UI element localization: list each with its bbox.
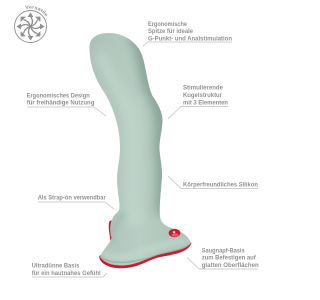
- callout: Ergonomische Spitze: Spitze für ideale: [148, 28, 193, 35]
- callout: Ergonomisches Design: Ergonomisches Design: [27, 92, 90, 99]
- callout: Ergonomisches Design: für freihändige Nutzung: [27, 100, 94, 107]
- body: silhouette: [90, 33, 191, 266]
- callout: Als Strap-on: [38, 194, 114, 209]
- callout: Stimulierende Kugelstruktur: [168, 85, 228, 119]
- callout: Körperfreundliches Silikon: [168, 176, 258, 188]
- callout: Saugnapf-Basis: glatten Oberflächen: [202, 262, 259, 269]
- product: silicone body with suction base: [90, 30, 192, 268]
- callout: Saugnapf-Basis: zum Befestigen auf: [202, 254, 256, 262]
- callout: Ultradünne Basis: Ultradünne Basis: [32, 262, 80, 270]
- callout: Ergonomische Spitze: Ergonomische: [148, 21, 187, 28]
- callout: Ergonomische Spitze: G-Punkt- und Analstimulation: [148, 35, 232, 42]
- callout: Stimulierende Kugelstruktur: Kugelstruktur: [183, 92, 222, 99]
- base: red lower rim: [99, 242, 192, 268]
- callout: Saugnapf-Basis: [187, 247, 259, 269]
- body: shading: [100, 30, 191, 262]
- callout: Ergonomisches Design: [27, 92, 106, 116]
- callout: Ergonomische Spitze: [143, 21, 232, 46]
- callout: Körperfreundliches Silikon: Körperfreundliches Silikon: [183, 181, 258, 188]
- icon: versatile badge: [14, 5, 48, 43]
- callout: Saugnapf-Basis: Saugnapf-Basis: [202, 247, 245, 254]
- callout: Ultradünne Basis: für ein hautnahes Gefühl: [32, 270, 101, 277]
- base: red back rim: [109, 220, 114, 242]
- icon: versatile badge: Versatile: [25, 5, 48, 16]
- callout: Stimulierende Kugelstruktur: mit 3 Elementen: [183, 100, 228, 106]
- callout: Stimulierende Kugelstruktur: Stimulierende: [183, 85, 223, 92]
- callout: Ultradünne Basis: [32, 262, 107, 277]
- callout: Als Strap-on: Als Strap-on verwendbar: [38, 194, 106, 202]
- logo: red button: [169, 229, 180, 237]
